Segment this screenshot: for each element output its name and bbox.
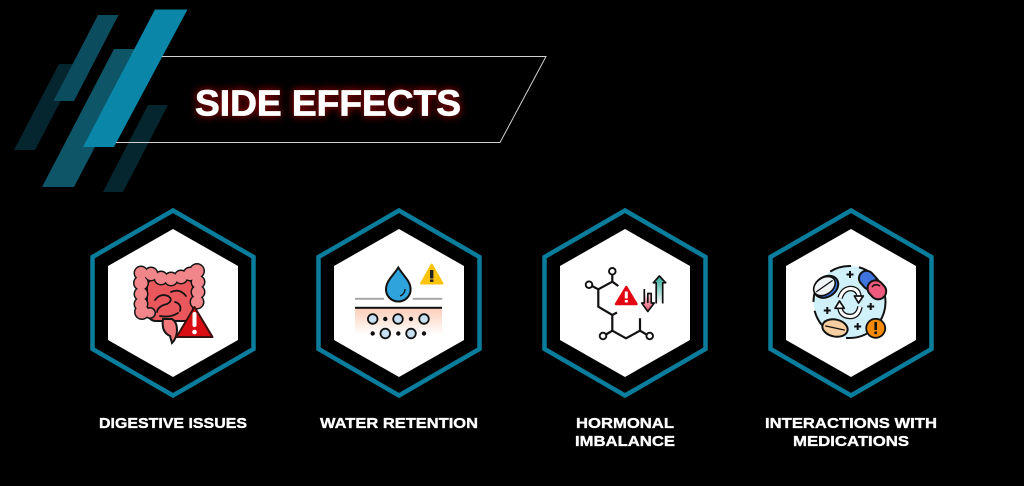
hexagon frame — [318, 210, 480, 396]
panel: hormonal imbalance — [544, 210, 706, 396]
icon: molecule with warning and arrows — [586, 268, 666, 339]
hexagon white center — [108, 229, 238, 377]
icon: water drop over skin layer — [355, 264, 442, 338]
panel: digestive issues — [92, 210, 254, 396]
label: water retention: WATER RETENTION — [320, 415, 478, 432]
label: digestive issues: DIGESTIVE ISSUES — [99, 415, 247, 432]
title: side effects: SIDE EFFECTS — [195, 82, 461, 124]
icon: intestine with warning — [133, 263, 212, 343]
label: hormonal imbalance line 2: IMBALANCE — [575, 433, 675, 450]
hexagon frame — [544, 210, 706, 396]
hexagon white center — [334, 229, 464, 377]
label: hormonal imbalance: HORMONAL — [576, 415, 674, 432]
icon: interacting pills — [810, 266, 889, 339]
hexagon frame — [770, 210, 932, 396]
hexagon frame — [92, 210, 254, 396]
panel: water retention — [318, 210, 480, 396]
title banner frame — [116, 56, 546, 142]
label: interactions with medications: INTERACTIONS WITH — [765, 415, 937, 432]
hexagon white center — [560, 229, 690, 377]
hexagon white center — [786, 229, 916, 377]
label: interactions with medications line 2: MEDICATIONS — [793, 433, 909, 450]
decorative slanted bars — [14, 10, 188, 192]
panel: interactions with medications — [770, 210, 932, 396]
